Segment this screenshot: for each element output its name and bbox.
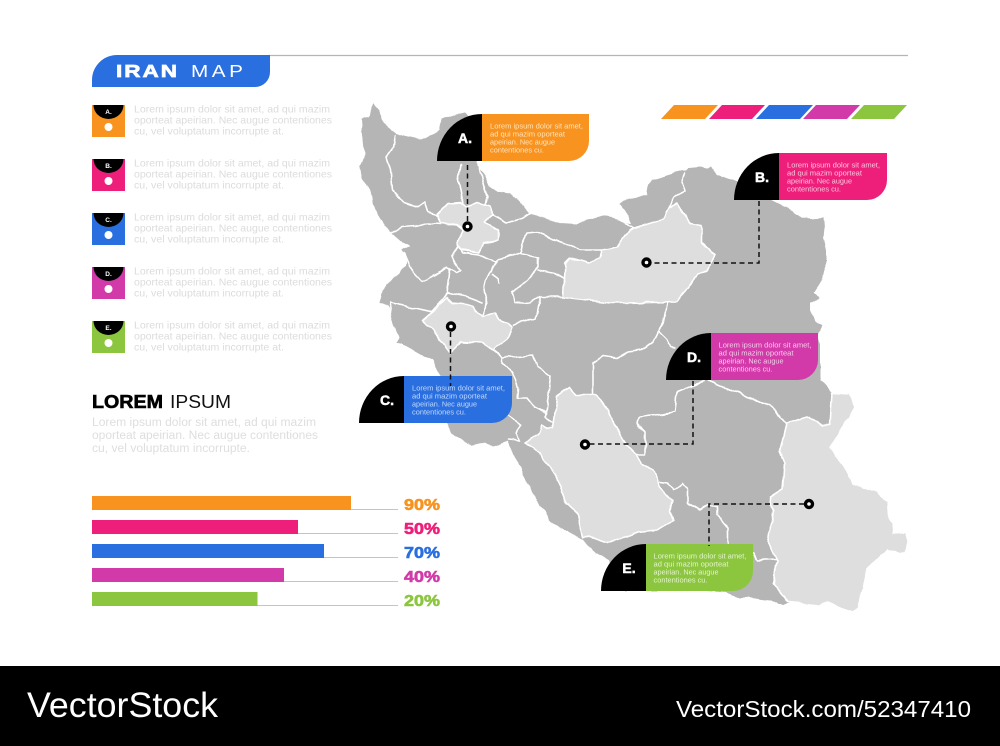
highlighted province B	[563, 203, 715, 303]
connector E with marker	[709, 500, 812, 546]
callout D: contentiones cu.	[718, 364, 772, 374]
country outline	[360, 105, 907, 612]
connector A with marker	[464, 165, 471, 230]
legend item A	[92, 104, 332, 138]
highlighted province A	[438, 202, 498, 253]
legend item C: Lorem ipsum dolor sit amet, ad qui mazim	[134, 212, 330, 224]
legend item E: oporteat apeirian. Nec augue contentiones	[134, 330, 332, 342]
callout C: C.	[380, 392, 394, 408]
callout E	[601, 544, 753, 591]
legend item A: Lorem ipsum dolor sit amet, ad qui mazim	[134, 104, 330, 116]
legend item C: cu, vel voluptatum incorrupte at.	[134, 234, 284, 246]
callout C: Lorem ipsum dolor sit amet,	[412, 384, 505, 392]
callout A: A.	[458, 130, 472, 146]
legend item B: oporteat apeirian. Nec augue contentiones	[134, 168, 332, 180]
callout C: contentiones cu.	[412, 408, 466, 416]
legend item D: Lorem ipsum dolor sit amet, ad qui mazim	[134, 266, 330, 278]
legend item E: cu, vel voluptatum incorrupte at.	[134, 342, 284, 354]
legend item D: cu, vel voluptatum incorrupte at.	[134, 288, 284, 300]
legend item D: oporteat apeirian. Nec augue contentiones	[134, 276, 332, 288]
callout A: contentiones cu.	[490, 146, 544, 154]
footer watermark bar: VectorStock	[27, 686, 219, 725]
legend item A: cu, vel voluptatum incorrupte at.	[134, 126, 284, 138]
highlighted province D	[525, 388, 673, 543]
legend item C	[92, 212, 332, 246]
callout B: contentiones cu.	[787, 184, 841, 194]
callout C: ad qui mazim oporteat	[412, 392, 488, 400]
callout A: Lorem ipsum dolor sit amet,	[490, 122, 583, 130]
callout D: apeirian. Nec augue	[718, 356, 784, 366]
footer watermark bar	[0, 666, 1000, 746]
bar chart	[92, 496, 440, 610]
callout C	[359, 376, 512, 423]
bar chart: 20%	[404, 593, 440, 610]
callout A: ad qui mazim oporteat	[490, 130, 566, 138]
callout C: apeirian. Nec augue	[412, 400, 477, 408]
legend list	[92, 104, 332, 354]
title banner: IRAN	[116, 62, 177, 81]
title banner	[92, 55, 908, 87]
callout B: Lorem ipsum dolor sit amet,	[787, 160, 880, 170]
legend item E: Lorem ipsum dolor sit amet, ad qui mazim	[134, 320, 330, 332]
lorem ipsum text block: LOREM	[92, 392, 163, 412]
legend item D: D.	[105, 271, 112, 278]
callout E: apeirian. Nec augue	[654, 568, 718, 576]
legend item C: C.	[105, 217, 112, 224]
callout A	[437, 114, 589, 161]
callout D: ad qui mazim oporteat	[718, 348, 794, 358]
callout E: E.	[622, 560, 636, 576]
legend item B	[92, 158, 332, 192]
connector D with marker	[582, 381, 693, 448]
callout E: Lorem ipsum dolor sit amet,	[654, 552, 746, 560]
lorem ipsum text block: cu, vel voluptatum incorrupte.	[92, 443, 250, 455]
province borders	[386, 135, 786, 560]
callout D: D.	[687, 349, 701, 365]
legend item B: Lorem ipsum dolor sit amet, ad qui mazim	[134, 158, 330, 170]
lorem ipsum text block	[92, 392, 318, 455]
connector C with marker	[448, 323, 454, 386]
lorem ipsum text block: Lorem ipsum dolor sit amet, ad qui mazim	[92, 417, 316, 429]
colour stripes	[661, 105, 907, 119]
lorem ipsum text block: oporteat apeirian. Nec augue contentiones	[92, 430, 318, 442]
bar chart: 40%	[404, 569, 440, 586]
legend item D	[92, 266, 332, 300]
legend item A: A.	[105, 109, 112, 116]
highlighted province E	[768, 393, 907, 612]
callout B	[734, 153, 887, 200]
legend item E: E.	[105, 325, 112, 332]
map of Iran	[360, 105, 907, 612]
legend item B: cu, vel voluptatum incorrupte at.	[134, 180, 284, 192]
legend item E	[92, 320, 332, 354]
highlighted province C	[423, 297, 512, 353]
callout A: apeirian. Nec augue	[490, 138, 555, 146]
callout E: ad qui mazim oporteat	[654, 560, 729, 568]
legend item A: oporteat apeirian. Nec augue contentiones	[134, 114, 332, 126]
callout E: contentiones cu.	[654, 576, 708, 584]
bar chart: 70%	[404, 545, 440, 562]
callout B: ad qui mazim oporteat	[787, 168, 863, 178]
lorem ipsum text block: IPSUM	[170, 392, 231, 412]
title banner: MAP	[191, 61, 243, 82]
bar chart: 50%	[404, 521, 440, 538]
callout D: Lorem ipsum dolor sit amet,	[718, 340, 812, 350]
legend item B: B.	[105, 163, 112, 170]
callout B: apeirian. Nec augue	[787, 176, 852, 186]
callout D	[666, 333, 818, 380]
callout B: B.	[755, 169, 769, 185]
footer watermark bar: VectorStock.com/52347410	[676, 696, 971, 722]
connector B with marker	[643, 201, 759, 266]
bar chart: 90%	[404, 497, 440, 514]
legend item C: oporteat apeirian. Nec augue contentiones	[134, 222, 332, 234]
